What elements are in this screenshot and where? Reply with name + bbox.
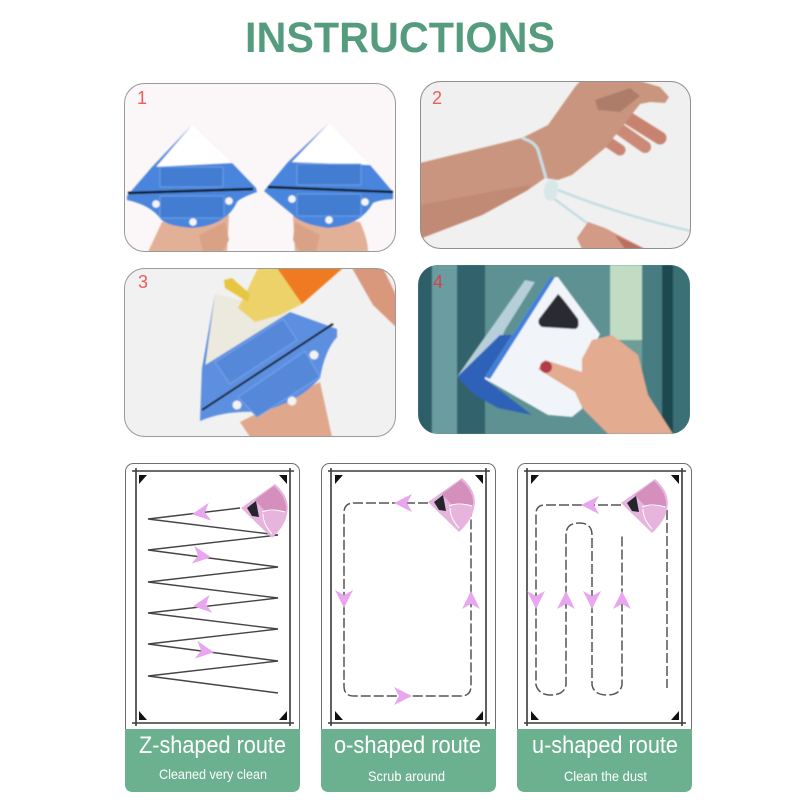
measure frame (524, 468, 686, 726)
panel: step 3 (124, 268, 396, 437)
icon: pink cleaner (621, 479, 668, 533)
icon: pink cleaner (428, 478, 475, 532)
route arrows (527, 496, 631, 609)
route note: Scrub around (368, 768, 445, 784)
route name: o-shaped route (334, 732, 481, 759)
card: o-shaped route (321, 464, 496, 792)
route arrows (335, 494, 480, 705)
panel: step 4 (418, 265, 690, 434)
title: INSTRUCTIONS (245, 14, 555, 62)
route note: Clean the dust (564, 768, 647, 784)
o route line (344, 503, 471, 696)
route name: Z-shaped route (139, 732, 286, 759)
measure frame (132, 468, 294, 726)
panel: step 2 (420, 81, 691, 249)
step number 2: 2 (432, 88, 442, 108)
route note: Cleaned very clean (159, 766, 267, 782)
panel: step 1 (124, 83, 396, 252)
card: Z-shaped route (125, 464, 300, 792)
icon: pink cleaner (241, 484, 288, 538)
card: u-shaped route (517, 464, 692, 792)
step number 4: 4 (433, 272, 443, 292)
z route line (148, 508, 278, 693)
u route line (536, 505, 667, 695)
step number 1: 1 (137, 88, 147, 108)
route arrows (191, 503, 215, 661)
measure frame (328, 468, 490, 726)
step number 3: 3 (138, 272, 148, 292)
route name: u-shaped route (532, 732, 678, 759)
